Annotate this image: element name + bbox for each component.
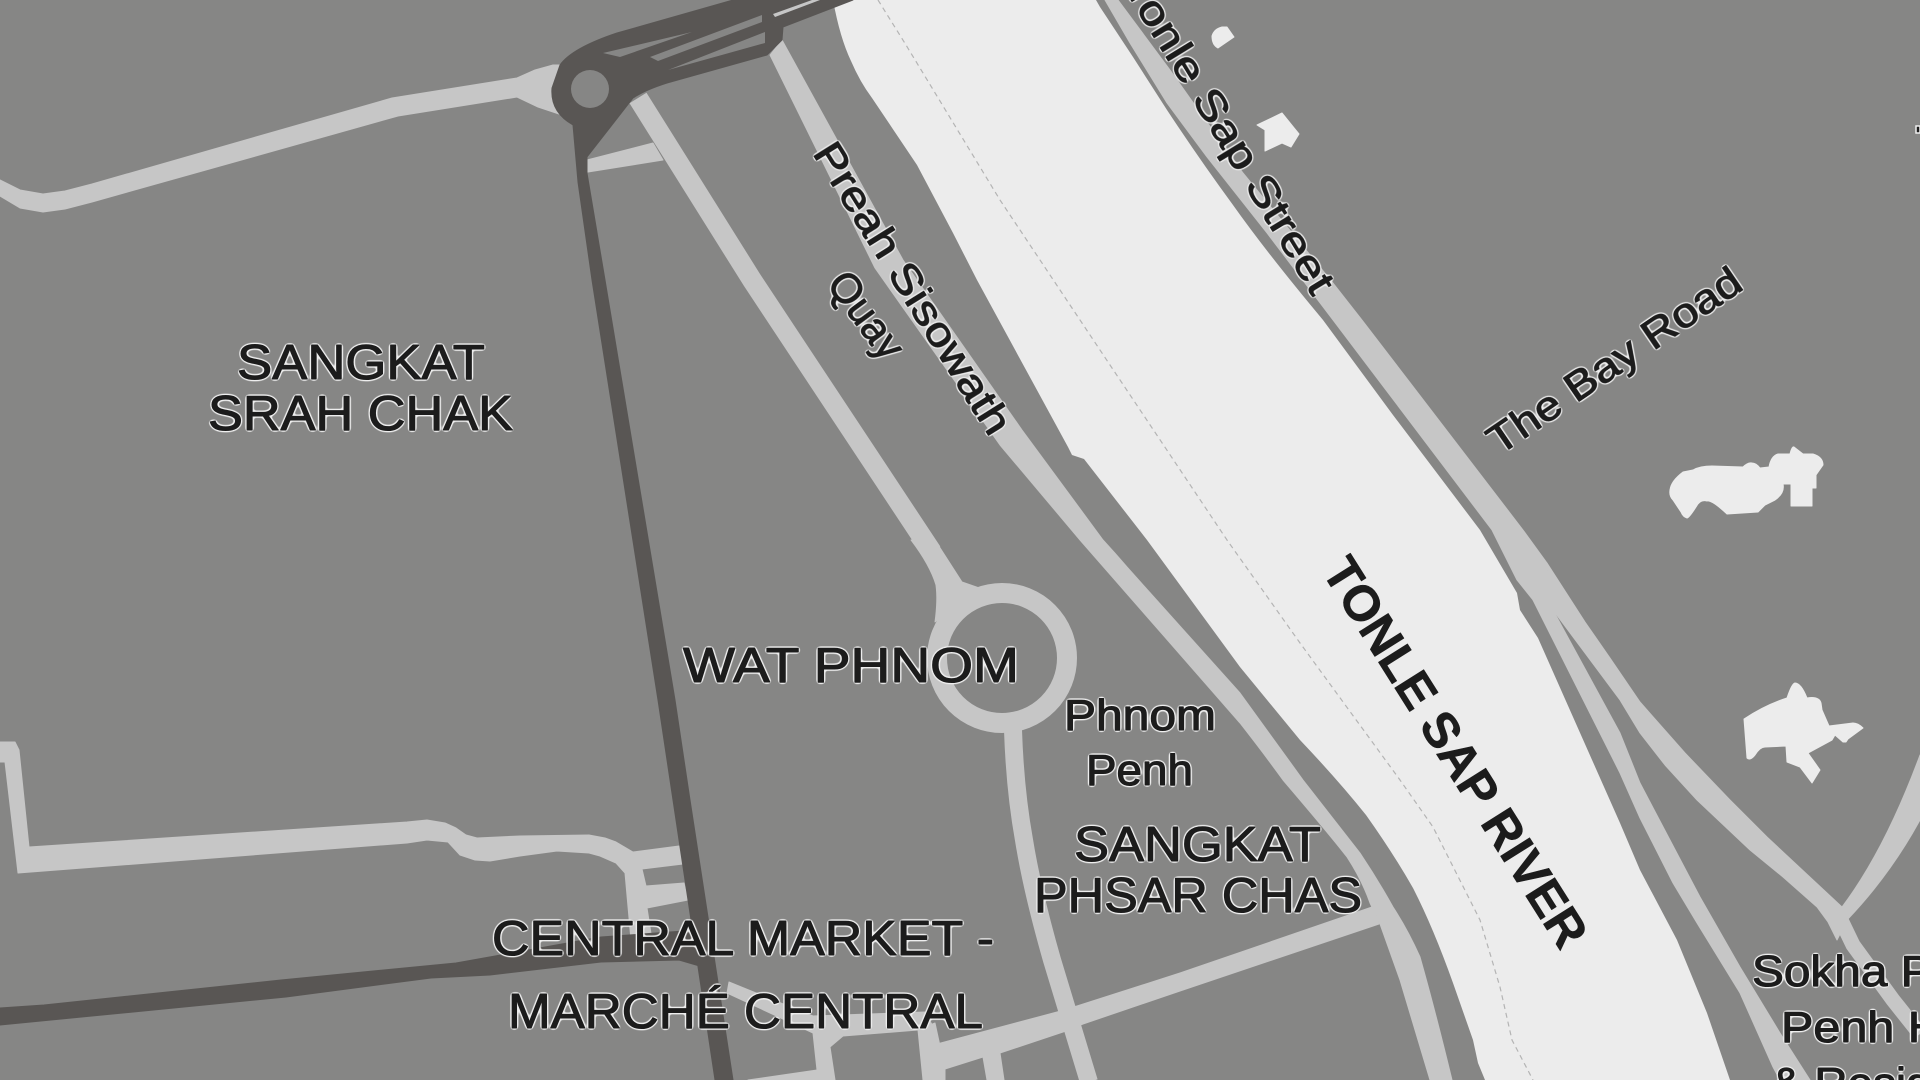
building: long east bbox=[1670, 447, 1823, 518]
label: Central Market: CENTRAL MARKET - bbox=[492, 912, 994, 966]
road: short link bbox=[587, 143, 663, 172]
label: Phnom Penh: Phnom bbox=[1064, 691, 1216, 740]
label: Sokha Phnom Penh Hotel bbox=[1752, 947, 1920, 1080]
label: Phnom Penh: Penh bbox=[1086, 746, 1193, 795]
road: market vertical bbox=[918, 1023, 945, 1080]
label: Sangkat Phsar Chas: PHSAR CHAS bbox=[1034, 869, 1362, 923]
road: dark major east-west bbox=[0, 930, 710, 1025]
road: diagonal to roundabout bbox=[638, 98, 932, 552]
label: The Bay Road: The Bay Road bbox=[1478, 258, 1750, 463]
label: Sangkat Srah Chak bbox=[208, 336, 513, 441]
building: small north bbox=[1212, 27, 1234, 48]
river: Tonle Sap water bbox=[833, 0, 1730, 1080]
junction island 3 bbox=[668, 32, 765, 70]
road: east branch bbox=[1547, 563, 1847, 940]
label: Sangkat Phsar Chas: SANGKAT bbox=[1074, 818, 1321, 872]
label: Central Market: MARCHÉ CENTRAL bbox=[508, 985, 983, 1039]
road: west block road bbox=[0, 742, 688, 940]
road: dark major junction and north-south bbox=[552, 0, 853, 1080]
road: east-west diagonal bbox=[937, 907, 1379, 1069]
label: Sangkat Srah Chak: SRAH CHAK bbox=[208, 387, 513, 441]
label: Central Market bbox=[492, 912, 994, 1039]
label: Tonle Sap River: TONLE SAP RIVER bbox=[1312, 547, 1599, 958]
label: Wat Phnom: WAT PHNOM bbox=[683, 639, 1019, 693]
road: south-east branch bbox=[1533, 600, 1810, 1080]
junction island 2 bbox=[650, 15, 762, 61]
junction island 1 bbox=[603, 32, 692, 57]
label: Sangkat Phsar Chas bbox=[1034, 818, 1362, 923]
label: Quay: Quay bbox=[819, 261, 915, 368]
roundabout centre bbox=[571, 70, 609, 108]
road: western road to junction bbox=[0, 65, 562, 212]
road: Wat Phnom ring bbox=[911, 540, 1067, 723]
river boundary dashed line bbox=[878, 0, 1533, 1080]
road: short south stub bbox=[983, 1053, 1004, 1080]
road: south from ring bbox=[1013, 730, 1089, 1080]
label: Phnom Penh bbox=[1064, 691, 1216, 795]
label: Preah Sisowath: Preah Sisowath bbox=[804, 133, 1021, 443]
road: north-east branch bbox=[1842, 755, 1920, 920]
junction light strip bbox=[773, 0, 820, 17]
road: market block bbox=[727, 982, 935, 1080]
road: Tonle Sap Street bbox=[1105, 0, 1553, 610]
road: Preah Sisowath Quay bbox=[770, 40, 1452, 1080]
label: Sangkat Srah Chak: SANGKAT bbox=[237, 336, 485, 390]
road: south-east continuation bbox=[1840, 918, 1920, 1034]
building: pentagon bbox=[1257, 113, 1299, 151]
building: irregular east bbox=[1744, 683, 1863, 783]
